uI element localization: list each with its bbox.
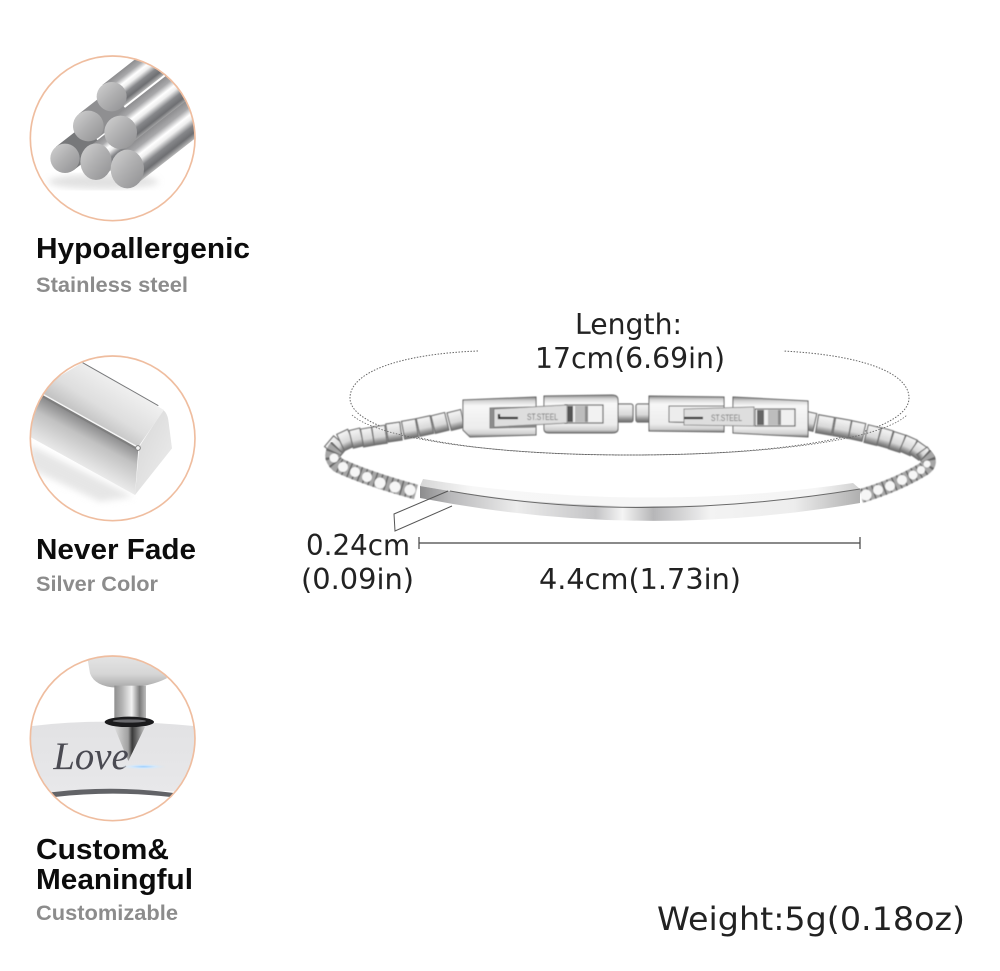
heading: Custom & Meaningful: Meaningful (36, 864, 193, 896)
center links (616, 404, 652, 422)
engraved plate (27, 722, 200, 793)
curved bar front face (420, 486, 860, 521)
bar end face (135, 410, 172, 495)
label: bar width (301, 529, 414, 596)
heading: Hypoallergenic: Hypoallergenic (36, 233, 250, 265)
left cube chain (325, 410, 465, 458)
text: Customizable: Customizable (36, 902, 178, 925)
rod end faces (50, 82, 144, 188)
heading: Never Fade: Never Fade (36, 534, 196, 566)
label: bar width: (0.09in) (301, 563, 414, 596)
laser glow (121, 764, 160, 768)
bar front face (31, 397, 138, 495)
engraver shaft (114, 686, 146, 721)
text: Silver Color: Silver Color (36, 573, 158, 596)
tongue with stamp (494, 405, 567, 427)
engraver tip (114, 727, 145, 761)
bar top face (37, 362, 164, 447)
clasp link 4 (733, 397, 808, 437)
rod bodies (56, 60, 194, 182)
label: length: 17cm(6.69in) (535, 342, 725, 375)
engraver head (88, 657, 167, 688)
right zircon stones (860, 455, 930, 500)
rubber ring (105, 717, 154, 727)
label: length: Length: (575, 308, 682, 341)
left zircon stones (330, 447, 416, 496)
icon: stainless steel rods (30, 55, 196, 222)
label: bar width: 0.24cm (306, 529, 410, 562)
clasp link 3: ST.STEEL (711, 413, 742, 423)
engraved word: Love (52, 734, 129, 778)
bracelet (325, 395, 934, 521)
label: length (535, 308, 725, 375)
curved bar top surface (420, 479, 860, 506)
icon: polished silver bar (27, 356, 195, 521)
text: Stainless steel: Stainless steel (36, 274, 188, 297)
clasp link 1: ST.STEEL (527, 412, 558, 422)
icon: laser engraving (27, 653, 200, 821)
label: bar length: 4.4cm(1.73in) (539, 563, 741, 596)
clasp link 2 (544, 395, 618, 433)
clasp link 3 (649, 396, 754, 432)
right cube chain (799, 411, 934, 464)
clasp link 1 (463, 397, 567, 437)
dimension line: bar length (419, 537, 860, 549)
label: weight: Weight:5g(0.18oz) (657, 900, 965, 938)
heading: Custom & Meaningful: Custom& (36, 834, 169, 866)
heading: Custom & Meaningful (36, 834, 193, 896)
dotted length ellipse (350, 351, 909, 455)
tongue with stamp (684, 407, 754, 426)
width leader lines (394, 491, 452, 531)
dotted ellipse front overlay (352, 415, 907, 455)
